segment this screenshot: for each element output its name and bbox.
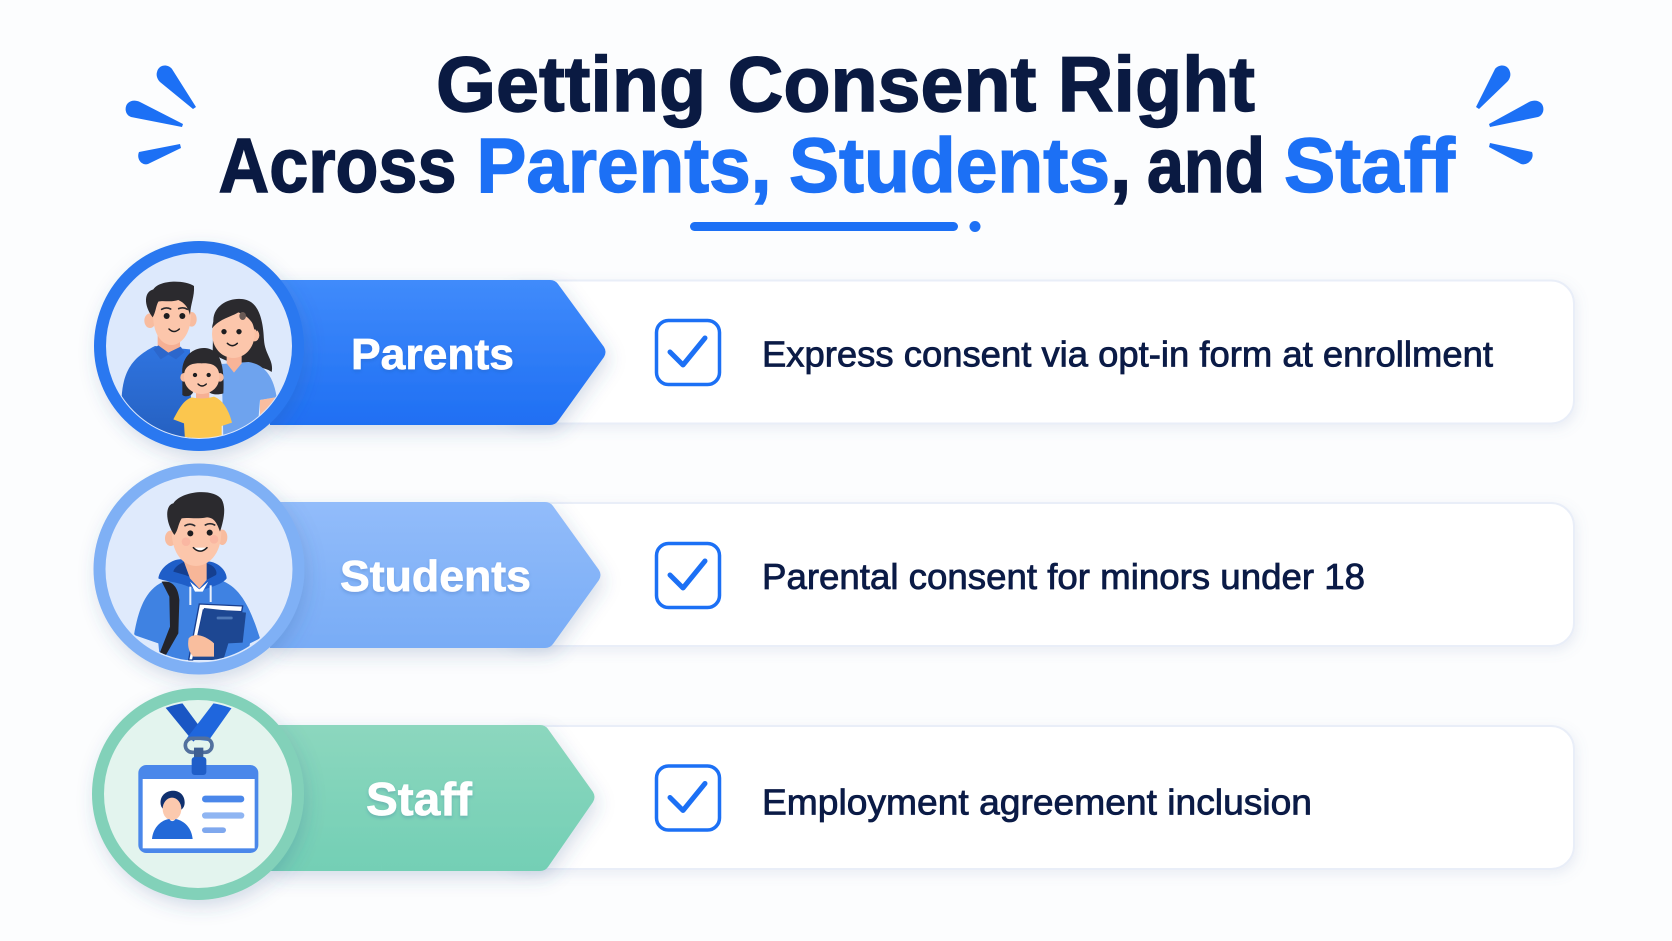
title: , (1110, 123, 1131, 209)
students checkbox icon (656, 544, 720, 608)
staff statement: Employment agreement inclusion (762, 782, 1312, 822)
parents ribbon (270, 280, 606, 425)
students statement card (500, 503, 1574, 646)
staff statement card (500, 726, 1574, 869)
icon: right sparkle (1476, 66, 1543, 164)
parents checkbox icon (656, 320, 720, 384)
title underline (690, 221, 980, 232)
title: Parents, (476, 123, 772, 209)
panel: parents row (100, 247, 1574, 445)
panel: staff row (98, 694, 1574, 894)
title: Students (789, 123, 1110, 209)
staff ribbon (270, 725, 594, 871)
students label: Students (340, 552, 531, 601)
panel: students row (100, 470, 1574, 668)
parents statement card (500, 280, 1574, 424)
title: and (1147, 123, 1265, 209)
icon: left sparkle (126, 66, 196, 164)
students ribbon (270, 502, 600, 648)
title (218, 40, 1455, 209)
students statement: Parental consent for minors under 18 (762, 556, 1365, 597)
staff avatar (98, 694, 298, 894)
title: Getting Consent Right (436, 40, 1255, 128)
title: Across (218, 123, 456, 209)
students avatar (100, 470, 298, 668)
title: Staff (1284, 123, 1455, 209)
parents statement: Express consent via opt-in form at enrollment (762, 334, 1493, 374)
parents label: Parents (351, 330, 514, 379)
staff checkbox icon (656, 766, 720, 830)
staff label: Staff (366, 773, 473, 825)
parents avatar (100, 247, 298, 445)
